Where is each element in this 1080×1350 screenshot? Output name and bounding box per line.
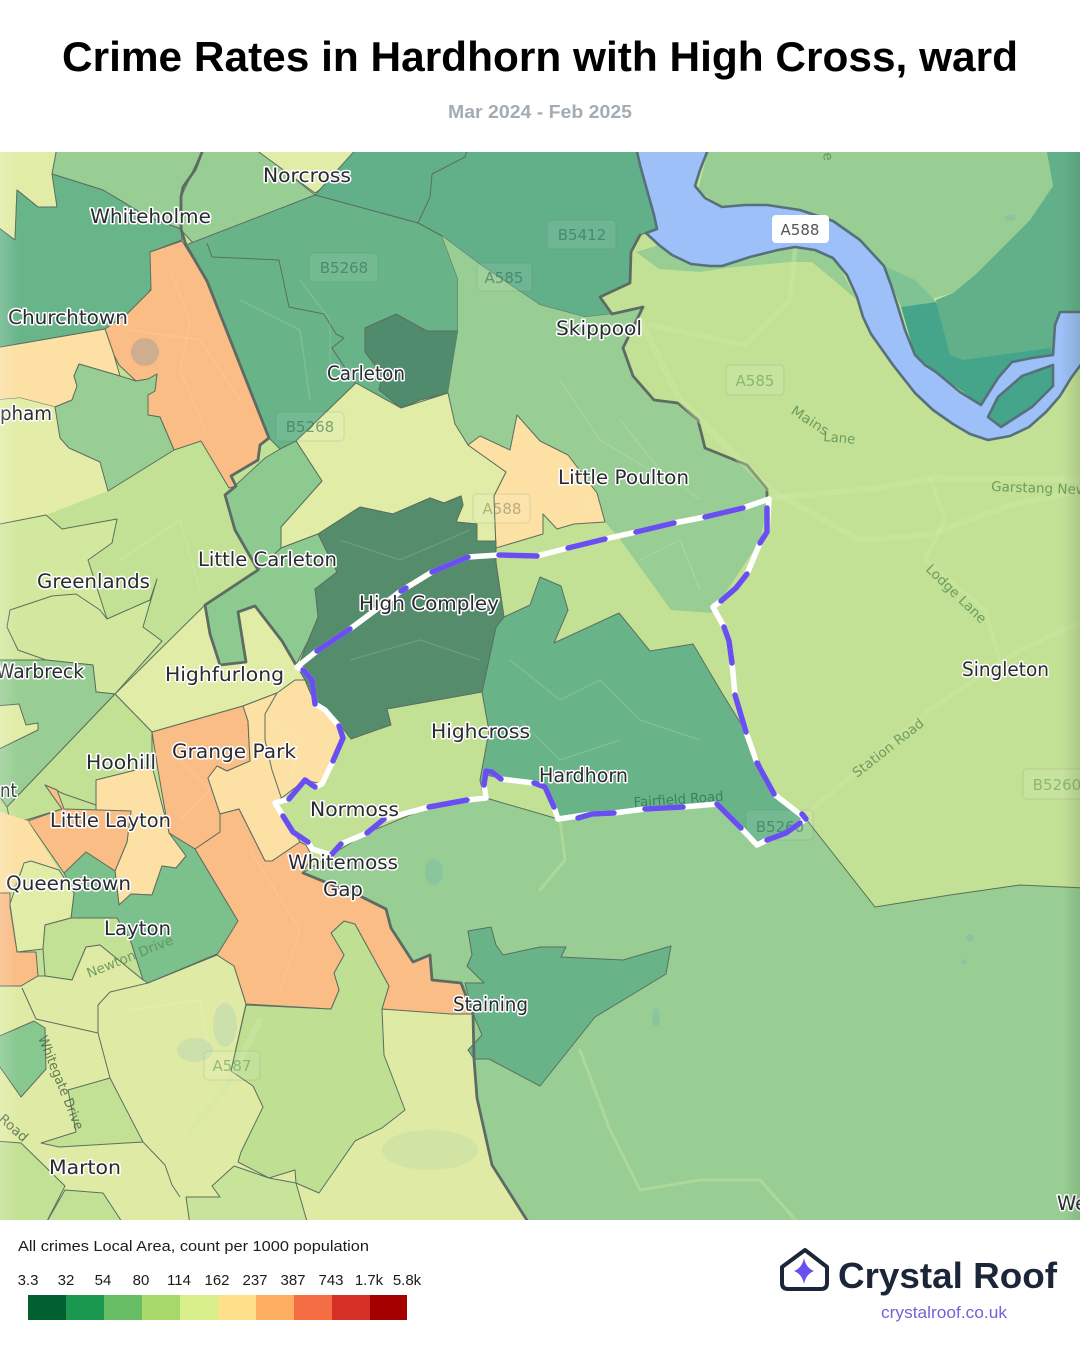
area: Queenstown orange [0,893,38,986]
area: top left band [52,147,204,229]
place name labels: Skippool [556,317,642,340]
area: river teal bank [901,302,1053,405]
area: top left pale [0,147,57,240]
shield B5260 ward [746,810,813,840]
river Wyre [636,147,1080,440]
thick district boundaries [181,147,767,1225]
logo wordmark: Crystal Roof [838,1255,1058,1296]
area: Skippool [442,236,769,613]
legend colour ramp [28,1295,407,1320]
shield A588 river [772,215,829,243]
shield A585 east [726,365,784,395]
shield B5260 east [1023,769,1080,799]
area: Greenlands [0,515,162,694]
place name labels: Queenstown [6,872,131,895]
area: pale west [0,398,108,525]
road names: Whitegate Drive [34,1034,87,1132]
residential street texture [120,270,700,1060]
area: Whitegate green [0,1021,46,1097]
area: Hoohill yellow [96,766,186,905]
area: Hoohill [7,694,152,821]
area: Staining green [465,927,671,1086]
shield A585 north: A585 [485,269,523,287]
ward boundary: Hardhorn with High Cross [275,499,806,855]
place name labels [0,164,1080,1215]
place name labels: Hoohill [86,751,156,774]
area: Marton pale [0,945,530,1225]
legend scale labels: 5.8k [393,1272,422,1289]
shield A585 east: A585 [736,372,774,390]
legend scale labels: 162 [204,1272,230,1289]
road names: Newton Drive [85,932,176,982]
neighbourhood areas [0,147,1080,1225]
place name labels: Greenlands [37,570,150,593]
place name labels: Gap [323,878,363,901]
area: Marton park [231,921,405,1193]
area: High Compley dark [298,496,504,739]
area: Marton light [0,1141,65,1225]
area: Grange Park yellow [208,680,343,861]
place name labels: Singleton [962,658,1049,681]
legend scale labels: 32 [58,1272,74,1289]
place name labels: Marton [49,1156,121,1179]
road names: e [819,151,836,162]
area: Churchtown grey blob [131,338,159,366]
panel: choropleth crime map [0,147,1080,1225]
place name labels: Little Carleton [198,548,337,571]
logo url: crystalroof.co.uk [881,1304,1008,1322]
shield A588 river: A588 [781,221,819,239]
legend title: All crimes Local Area, count per 1000 population [18,1238,369,1255]
area: river bank fade north [884,266,936,307]
shield B5268 north: B5268 [320,259,368,277]
river island [988,365,1053,427]
area: east of river [936,147,1080,362]
place name labels: Grange Park [172,740,297,763]
legend scale labels: 3.3 [18,1272,38,1289]
legend scale labels [18,1272,422,1289]
place name labels: Normoss [310,798,399,821]
legend scale labels: 1.7k [355,1272,384,1289]
place name labels: Carleton [327,362,405,385]
legend scale labels: 54 [95,1272,111,1289]
area: Highfurlong [115,605,305,732]
area: Little Layton orange [28,785,131,873]
inner boundary lines [7,147,468,1197]
area: Staining orange [195,809,473,1014]
area: Churchtown orange [105,241,269,488]
logo: Crystal Roof [782,1250,1058,1322]
shield A585 north [477,263,532,291]
shield A587: A587 [213,1057,251,1075]
area: Hardhorn ward green [480,577,806,845]
area: Norcross pale [258,152,352,194]
shield A587 [204,1051,260,1080]
place name labels: Hardhorn [539,764,628,787]
area: Whiteholme [0,174,182,348]
place name labels: Staining [453,993,528,1016]
place name labels: Whiteholme [90,205,211,228]
place name labels: Little Poulton [558,466,689,489]
shield B5268 north [309,253,378,282]
area: Little Carleton north [225,441,322,570]
place name labels: Highfurlong [165,663,284,686]
place name labels: Norcross [263,164,351,187]
road names: Mains [788,403,832,439]
place name labels: High Compley [359,592,499,615]
road names: Lane [823,429,856,448]
area: south fields [303,798,1080,1225]
area: Warbreck pale inset [0,704,38,751]
area: Little Poulton [468,415,605,548]
area: Layton green [64,833,238,983]
map edge shading left [0,152,18,1220]
place name labels: Little Layton [50,809,171,832]
area: Grange Park orange [152,706,250,849]
road names [0,151,1080,1146]
area: Little Carleton south [205,534,337,665]
place name labels: Highcross [431,720,530,743]
area: Carleton north [186,195,458,449]
area: Carleton dark [365,314,458,408]
area: bank west [636,245,857,300]
place name labels: Whitemoss [288,851,398,874]
area: Warbreck [0,660,115,807]
area: Whitegate light [41,1078,143,1147]
legend [18,1238,422,1320]
faint roads [190,250,1080,1225]
area: north-east fields [698,147,1053,307]
shield A588 middle [473,494,530,523]
shield A588 middle: A588 [483,500,521,518]
road shields [204,215,1080,1080]
map edge shading right [1062,152,1080,1220]
shield B5268 middle: B5268 [286,418,334,436]
place name labels: Layton [104,917,171,940]
area: Norcross [181,147,315,245]
legend scale labels: 80 [133,1272,149,1289]
shield B5412: B5412 [558,226,606,244]
place name labels: nt [0,779,17,802]
legend scale labels: 114 [167,1272,191,1289]
title: Crime Rates in Hardhorn with High Cross, ward [62,33,1018,80]
area: Marton park south [186,1166,308,1225]
legend scale labels: 387 [280,1272,306,1289]
subtitle: date range: Mar 2024 - Feb 2025 [448,102,632,122]
icon: house with sparkle [782,1250,827,1289]
place name labels: pham [0,402,52,425]
legend scale labels: 743 [318,1272,344,1289]
area: Queenstown pale [10,861,74,952]
area: west green [55,364,174,491]
area: Carleton pale [281,383,506,548]
place name labels: Churchtown [8,306,128,329]
road names: Station Road [850,715,927,781]
shield B5412 [547,220,616,249]
area: pale yellow west [0,329,120,407]
road names: Lodge Lane [922,561,989,627]
shield B5260 ward: B5260 [756,818,804,836]
area: Layton light [43,918,143,980]
area: Queenstown yellow [0,810,60,893]
shield B5268 middle [276,412,344,441]
legend scale labels: 237 [242,1272,268,1289]
map water features [177,215,1016,1170]
shield B5260 east: B5260 [1033,776,1080,794]
road names: Fairfield Road [633,789,724,811]
area: B5412 north [315,147,657,317]
area: Marton south [45,1190,124,1225]
